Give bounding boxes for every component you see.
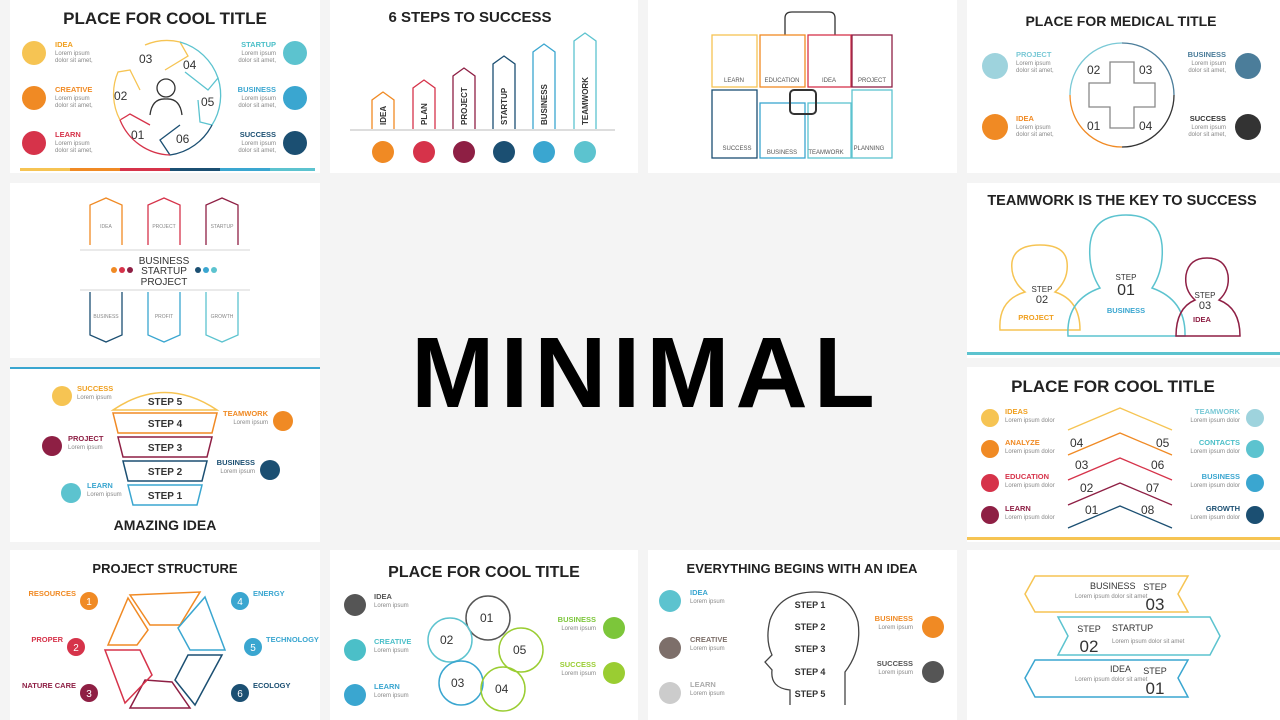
heading: 6 STEPS TO SUCCESS	[388, 9, 552, 26]
panel: chevrons cool title: 03	[1075, 458, 1089, 472]
panel: project structure: RESOURCES	[28, 589, 76, 598]
side items: PROJECT	[68, 434, 104, 443]
side items: Lorem ipsum	[374, 648, 409, 654]
panel: business startup project: GROWTH	[211, 314, 234, 320]
side items: SUCCESS	[1190, 114, 1226, 123]
panel: arrow banners: Lorem ipsum dolor sit amet	[1075, 594, 1148, 600]
briefcase labels: IDEA	[822, 78, 836, 84]
side items: CREATIVE	[374, 637, 411, 646]
center text: STARTUP	[141, 266, 187, 277]
panel: cycle cool title	[10, 0, 320, 173]
side items: Lorem ipsum	[68, 445, 103, 451]
step numbers: 02	[114, 89, 128, 103]
side items: SUCCESS	[560, 660, 596, 669]
right items	[238, 40, 307, 155]
step labels: STARTUP	[500, 87, 509, 125]
side items: BUSINESS	[1202, 472, 1240, 481]
side items: Lorem ipsum	[561, 626, 596, 632]
step labels: IDEA	[379, 106, 388, 125]
step labels: BUSINESS	[540, 83, 549, 125]
side items: CONTACTS	[1199, 438, 1240, 447]
step numbers: 05	[201, 95, 215, 109]
panel: teamwork: 02	[1036, 294, 1048, 306]
side items: IDEA	[690, 588, 709, 597]
panel: arrow banners: STEP	[1143, 666, 1167, 676]
chevron stack	[1068, 408, 1172, 528]
center text: PROJECT	[141, 277, 187, 288]
panel: teamwork	[967, 183, 1280, 358]
panel: arrow banners: STEP	[1143, 582, 1167, 592]
side items: IDEA	[1016, 114, 1035, 123]
step arrows	[350, 33, 615, 130]
side items: LEARN	[374, 682, 400, 691]
side items: SUCCESS	[77, 384, 113, 393]
overlapping circles	[428, 596, 543, 711]
right items: dolor sit amet,	[238, 103, 276, 109]
panel: circles cool title: 01	[480, 611, 494, 625]
panel: amazing idea funnel: STEP 3	[148, 443, 183, 454]
panel: everything begins with an idea: STEP 3	[795, 644, 825, 654]
panel: arrow banners: STEP	[1077, 624, 1101, 634]
side items: Lorem ipsum	[233, 420, 268, 426]
numbered items: 4	[237, 597, 243, 608]
panel: everything begins with an idea: STEP 4	[795, 667, 825, 677]
panel: amazing idea funnel: STEP 5	[148, 397, 183, 408]
briefcase labels: SUCCESS	[722, 146, 752, 152]
panel: teamwork: BUSINESS	[1107, 306, 1145, 315]
panel: medical title	[967, 0, 1280, 173]
panel: amazing idea funnel	[10, 367, 320, 542]
panel: arrow banners: BUSINESS	[1090, 581, 1136, 591]
people outlines	[1000, 215, 1240, 336]
panel: teamwork: STEP	[1195, 291, 1215, 300]
panel: business startup project: BUSINESS	[93, 314, 119, 320]
side items: Lorem ipsum dolor	[1190, 449, 1240, 455]
panel: project structure: NATURE CARE	[22, 681, 76, 690]
side items: dolor sit amet,	[1188, 68, 1226, 74]
side items: TEAMWORK	[1195, 407, 1241, 416]
right items: SUCCESS	[240, 130, 276, 139]
side items: Lorem ipsum	[1016, 125, 1051, 131]
side items: PROJECT	[1016, 50, 1052, 59]
funnel steps	[113, 392, 217, 505]
side items: LEARN	[690, 680, 716, 689]
briefcase labels: EDUCATION	[765, 78, 799, 84]
cross diagram	[1070, 43, 1174, 147]
side items: Lorem ipsum	[1191, 61, 1226, 67]
panel: chevrons cool title: 02	[1080, 481, 1094, 495]
side items: Lorem ipsum	[690, 599, 725, 605]
panel: project structure	[10, 550, 320, 720]
panel: business startup project: IDEA	[100, 224, 112, 230]
panel: chevrons cool title: 01	[1085, 503, 1099, 517]
panel: teamwork: 01	[1117, 282, 1135, 299]
numbered items: 2	[73, 643, 79, 654]
panel: teamwork: 03	[1199, 300, 1211, 312]
side items: BUSINESS	[1188, 50, 1226, 59]
side items: BUSINESS	[217, 458, 255, 467]
side items: BUSINESS	[558, 615, 596, 624]
panel: arrow banners: STARTUP	[1112, 623, 1153, 633]
side items: Lorem ipsum	[690, 691, 725, 697]
side items: Lorem ipsum	[690, 646, 725, 652]
heading: EVERYTHING BEGINS WITH AN IDEA	[687, 561, 918, 576]
side items: Lorem ipsum dolor	[1005, 483, 1055, 489]
heading: PLACE FOR COOL TITLE	[63, 9, 267, 28]
briefcase labels: LEARN	[724, 78, 744, 84]
heading: PROJECT STRUCTURE	[92, 561, 238, 576]
panel: 6 steps to success	[330, 0, 638, 173]
panel: chevrons cool title	[967, 367, 1280, 542]
side items: IDEAS	[1005, 407, 1028, 416]
left items: dolor sit amet,	[55, 103, 93, 109]
heading: PLACE FOR COOL TITLE	[388, 564, 580, 581]
panel: circles cool title: 03	[451, 676, 465, 690]
panel: project structure: TECHNOLOGY	[266, 635, 319, 644]
side items: Lorem ipsum	[220, 469, 255, 475]
panel: everything begins with an idea	[648, 550, 957, 720]
right items: Lorem ipsum	[241, 51, 276, 57]
panel: amazing idea funnel: STEP 4	[148, 419, 183, 430]
cycle diagram	[114, 40, 221, 155]
side items: Lorem ipsum	[878, 670, 913, 676]
panel: arrow banners	[967, 550, 1280, 720]
step numbers: 04	[183, 58, 197, 72]
left items: Lorem ipsum	[55, 96, 90, 102]
heading: AMAZING IDEA	[114, 517, 216, 533]
side items: dolor sit amet,	[1016, 132, 1054, 138]
left items: dolor sit amet,	[55, 148, 93, 154]
side items: CREATIVE	[690, 635, 727, 644]
panel: briefcase	[648, 0, 957, 173]
side items: IDEA	[374, 592, 393, 601]
panel: arrow banners: 03	[1146, 595, 1164, 614]
side items: TEAMWORK	[223, 409, 269, 418]
numbered items: 5	[250, 643, 256, 654]
side items: Lorem ipsum	[1191, 125, 1226, 131]
panel: arrow banners: 01	[1146, 679, 1164, 698]
side items	[981, 407, 1264, 524]
step numbers: 06	[176, 132, 190, 146]
briefcase diagram	[712, 12, 892, 158]
numbered items: 6	[237, 689, 243, 700]
panel: medical title: 01	[1087, 119, 1101, 133]
step labels: TEAMWORK	[581, 77, 590, 125]
left items: LEARN	[55, 130, 81, 139]
panel: chevrons cool title: 07	[1146, 481, 1160, 495]
side items: BUSINESS	[875, 614, 913, 623]
right items: BUSINESS	[238, 85, 276, 94]
hexagon cycle	[105, 592, 225, 708]
side items: LEARN	[1005, 504, 1031, 513]
side items: Lorem ipsum	[374, 603, 409, 609]
right items: Lorem ipsum	[241, 96, 276, 102]
left items: CREATIVE	[55, 85, 92, 94]
side items: Lorem ipsum	[878, 625, 913, 631]
panel: arrow banners: IDEA	[1110, 664, 1131, 674]
left items: Lorem ipsum	[55, 51, 90, 57]
panel: chevrons cool title: 06	[1151, 458, 1165, 472]
panel: amazing idea funnel: STEP 2	[148, 467, 183, 478]
numbered items	[67, 592, 262, 702]
step labels: PROJECT	[460, 87, 469, 125]
panel: teamwork: STEP	[1116, 273, 1136, 282]
side items	[659, 588, 944, 704]
side items: dolor sit amet,	[1016, 68, 1054, 74]
briefcase labels	[722, 78, 886, 156]
briefcase labels: TEAMWORK	[808, 150, 844, 156]
title: MINIMAL: MINIMAL	[411, 317, 881, 429]
heading: PLACE FOR COOL TITLE	[1011, 377, 1215, 396]
panel: project structure: ENERGY	[253, 589, 285, 598]
heading: TEAMWORK IS THE KEY TO SUCCESS	[987, 193, 1257, 209]
side items: LEARN	[87, 481, 113, 490]
panel: teamwork: STEP	[1032, 285, 1052, 294]
briefcase labels: PROJECT	[858, 78, 886, 84]
left items: dolor sit amet,	[55, 58, 93, 64]
side items: ANALYZE	[1005, 438, 1040, 447]
right items: dolor sit amet,	[238, 58, 276, 64]
panel: chevrons cool title: 04	[1070, 436, 1084, 450]
step numbers	[114, 52, 215, 146]
panel: medical title: 03	[1139, 63, 1153, 77]
panel: amazing idea funnel: STEP 1	[148, 491, 183, 502]
panel: teamwork: PROJECT	[1018, 313, 1054, 322]
left items: IDEA	[55, 40, 74, 49]
left items: Lorem ipsum	[55, 141, 90, 147]
panel: arrow banners: Lorem ipsum dolor sit amet	[1075, 677, 1148, 683]
panel: everything begins with an idea: STEP 1	[795, 600, 825, 610]
heading: PLACE FOR MEDICAL TITLE	[1025, 13, 1217, 29]
side items	[42, 384, 293, 503]
briefcase labels: PLANNING	[854, 146, 885, 152]
side items: Lorem ipsum dolor	[1190, 418, 1240, 424]
columns	[80, 198, 250, 342]
center text: BUSINESS	[139, 256, 190, 267]
step numbers: 01	[131, 128, 145, 142]
side items: Lorem ipsum	[561, 671, 596, 677]
panel: project structure: ECOLOGY	[253, 681, 291, 690]
briefcase labels: BUSINESS	[767, 150, 797, 156]
panel: chevrons cool title: 05	[1156, 436, 1170, 450]
panel: business startup project: PROFIT	[155, 314, 173, 320]
step numbers: 03	[139, 52, 153, 66]
panel: medical title: 02	[1087, 63, 1101, 77]
side items: EDUCATION	[1005, 472, 1049, 481]
head steps	[765, 592, 859, 705]
numbered items: 3	[86, 689, 92, 700]
side items	[344, 592, 625, 706]
panel: arrow banners: 02	[1080, 637, 1098, 656]
right items: STARTUP	[241, 40, 276, 49]
panel: arrow banners: Lorem ipsum dolor sit amet	[1112, 639, 1185, 645]
panel: circles cool title: 05	[513, 643, 527, 657]
center text	[139, 256, 190, 288]
banners	[1025, 576, 1220, 697]
panel: teamwork: IDEA	[1193, 315, 1212, 324]
side items: Lorem ipsum	[87, 492, 122, 498]
side items: Lorem ipsum	[374, 693, 409, 699]
side items: Lorem ipsum dolor	[1190, 483, 1240, 489]
panel: medical title: 04	[1139, 119, 1153, 133]
panel: everything begins with an idea: STEP 2	[795, 622, 825, 632]
left items	[22, 40, 93, 155]
numbered items: 1	[86, 597, 92, 608]
side items: Lorem ipsum dolor	[1005, 515, 1055, 521]
side items: Lorem ipsum	[1016, 61, 1051, 67]
side items: Lorem ipsum dolor	[1005, 418, 1055, 424]
side items: Lorem ipsum dolor	[1005, 449, 1055, 455]
side items: Lorem ipsum dolor	[1190, 515, 1240, 521]
panel: chevrons cool title: 08	[1141, 503, 1155, 517]
panel: circles cool title: 04	[495, 682, 509, 696]
step labels: PLAN	[420, 103, 429, 125]
step labels	[379, 77, 590, 125]
panel: business startup project: STARTUP	[211, 224, 234, 230]
side items: Lorem ipsum	[77, 395, 112, 401]
side items	[982, 50, 1261, 140]
step icons	[372, 141, 596, 163]
panel: everything begins with an idea: STEP 5	[795, 689, 825, 699]
panel: circles cool title: 02	[440, 633, 454, 647]
side items: SUCCESS	[877, 659, 913, 668]
right items: dolor sit amet,	[238, 148, 276, 154]
side items: GROWTH	[1206, 504, 1240, 513]
panel: business startup project: PROJECT	[152, 224, 176, 230]
right items: Lorem ipsum	[241, 141, 276, 147]
side items: dolor sit amet,	[1188, 132, 1226, 138]
panel: business startup project	[10, 183, 320, 358]
panel: project structure: PROPER	[31, 635, 64, 644]
panel: circles cool title	[330, 550, 638, 720]
